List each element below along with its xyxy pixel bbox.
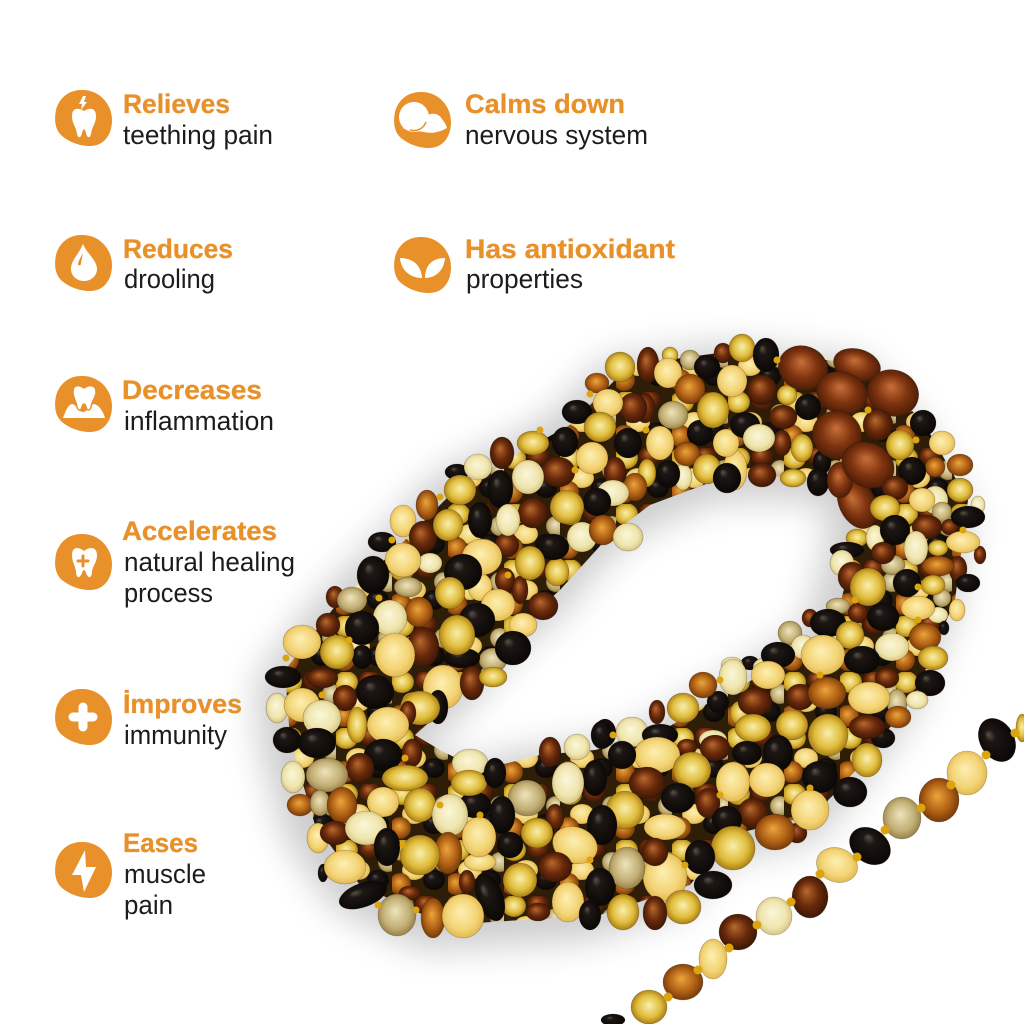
heading: Decreases [122, 375, 262, 405]
description: properties [466, 264, 583, 294]
icon: lightning bolt [55, 842, 112, 898]
icon: drop [55, 235, 112, 291]
benefit: reduces drooling [55, 234, 233, 294]
benefit: eases muscle pain [55, 828, 206, 920]
heading: Calms down [465, 89, 625, 119]
shadow under necklace [256, 345, 971, 950]
icon: tooth in gum [55, 376, 112, 432]
benefit: decreases inflammation [55, 375, 274, 436]
benefit: has antioxidant properties [394, 234, 675, 294]
heading: Accelerates [122, 516, 277, 546]
icon: tooth with plus [55, 534, 112, 590]
necklace bundle of amber beads [265, 334, 986, 938]
benefit: eases muscle pain: pain [124, 890, 173, 920]
heading: Has antioxidant [465, 234, 675, 264]
icon: sleeping baby [394, 92, 451, 148]
loose amber bead strand [601, 712, 1024, 1024]
description: nervous system [465, 120, 648, 150]
benefit: accelerates natural healing process: process [124, 578, 213, 608]
heading: Relieves [123, 89, 230, 119]
benefit: calms down nervous system [394, 89, 648, 150]
description: natural healing [124, 547, 295, 577]
icon: plus [55, 689, 112, 745]
description: immunity [124, 720, 227, 750]
benefit: improves immunity [55, 689, 242, 750]
description: muscle [124, 859, 206, 889]
description: drooling [124, 264, 215, 294]
heading: Reduces [123, 234, 233, 264]
heading: İmproves [123, 689, 242, 719]
benefit: relieves teething pain [55, 89, 273, 150]
description: inflammation [124, 406, 274, 436]
benefit: accelerates natural healing process [55, 516, 295, 608]
description: teething pain [123, 120, 273, 150]
heading: Eases [123, 828, 198, 858]
icon: tooth with lightning [55, 90, 112, 146]
icon: leaves [394, 237, 451, 293]
